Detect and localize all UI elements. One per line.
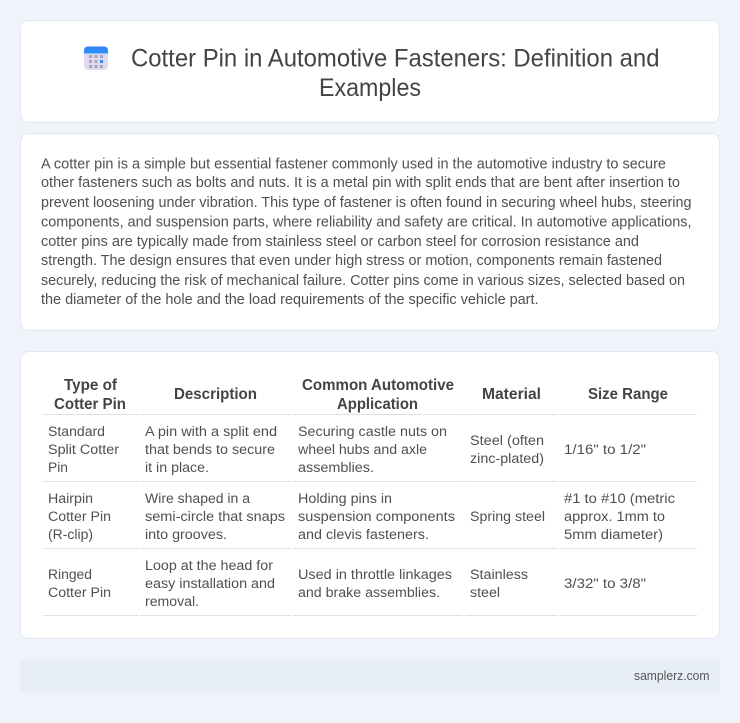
table row: ringed cotter pin: steel bbox=[470, 585, 500, 601]
table row: hairpin cotter pin: Holding pins in bbox=[298, 491, 392, 507]
table row: ringed cotter pin: Stainless bbox=[470, 567, 528, 583]
footer source text: samplerz.com bbox=[634, 669, 710, 683]
paragraph: other fasteners such as bolts and nuts. It is a metal pin with split ends that are bent after insertion to bbox=[41, 175, 680, 191]
paragraph: the diameter of the hole and the load requirements of the specific vehicle part. bbox=[41, 292, 538, 308]
table header row: Application bbox=[337, 396, 418, 413]
table row: ringed cotter pin: Cotter Pin bbox=[48, 585, 111, 601]
table row: hairpin cotter pin: into grooves. bbox=[145, 527, 227, 543]
table header row: Material bbox=[482, 386, 541, 403]
footer bbox=[20, 659, 720, 693]
paragraph: strength. The design ensures that even under high stress or motion, components remain fastened bbox=[41, 253, 662, 269]
table header row: Type of bbox=[64, 377, 118, 394]
panel: definition text bbox=[20, 134, 720, 330]
table row: standard split cotter pin: Pin bbox=[48, 460, 68, 476]
table row: hairpin cotter pin: Cotter Pin bbox=[48, 509, 111, 525]
table row: hairpin cotter pin: Spring steel bbox=[470, 509, 545, 525]
table row: ringed cotter pin: Used in throttle linkages bbox=[298, 567, 452, 583]
table row: hairpin cotter pin bbox=[48, 491, 675, 543]
table row: ringed cotter pin: Loop at the head for bbox=[145, 558, 273, 574]
heading bbox=[131, 46, 660, 102]
paragraph: A cotter pin is a simple but essential fastener commonly used in the automotive industry to secure bbox=[41, 156, 666, 172]
table row: hairpin cotter pin: Hairpin bbox=[48, 491, 93, 507]
table row: ringed cotter pin: removal. bbox=[145, 594, 199, 610]
heading: Cotter Pin in Automotive Fasteners: Definition and bbox=[131, 46, 660, 73]
table row: standard split cotter pin: Standard bbox=[48, 424, 105, 440]
table row: standard split cotter pin: A pin with a split end bbox=[145, 424, 277, 440]
table header row: Cotter Pin bbox=[54, 396, 126, 413]
paragraph bbox=[41, 156, 692, 308]
table row: ringed cotter pin: easy installation and bbox=[145, 576, 275, 592]
table row: standard split cotter pin: that bends to secure bbox=[145, 442, 275, 458]
table row: hairpin cotter pin: approx. 1mm to bbox=[564, 509, 665, 525]
table row: hairpin cotter pin: semi-circle that snaps bbox=[145, 509, 285, 525]
table row: ringed cotter pin: and brake assemblies. bbox=[298, 585, 440, 601]
table row: standard split cotter pin: Steel (often bbox=[470, 433, 544, 449]
paragraph: prevent loosening under vibration. This type of fastener is often found in securing wheel hubs, steering bbox=[41, 195, 692, 211]
table row: standard split cotter pin: 1/16" to 1/2" bbox=[564, 442, 646, 458]
table row: standard split cotter pin: assemblies. bbox=[298, 460, 374, 476]
table row: hairpin cotter pin: suspension components bbox=[298, 509, 455, 525]
table row: standard split cotter pin: Split Cotter bbox=[48, 442, 119, 458]
heading: Examples bbox=[319, 75, 421, 102]
table row: ringed cotter pin bbox=[48, 558, 646, 610]
icon: calendar bbox=[84, 46, 108, 70]
panel: comparison table bbox=[20, 352, 720, 638]
table row: hairpin cotter pin: 5mm diameter) bbox=[564, 527, 663, 543]
table header row bbox=[54, 377, 668, 413]
table row: ringed cotter pin: 3/32" to 3/8" bbox=[564, 576, 646, 592]
table row: hairpin cotter pin: and clevis fasteners. bbox=[298, 527, 429, 543]
table row: hairpin cotter pin: #1 to #10 (metric bbox=[564, 491, 675, 507]
table header row: Size Range bbox=[588, 386, 668, 403]
panel: title bbox=[20, 20, 720, 122]
table row: standard split cotter pin: it in place. bbox=[145, 460, 209, 476]
table row: ringed cotter pin: Ringed bbox=[48, 567, 92, 583]
paragraph: components, and suspension parts, where reliability and safety are critical. In automotive applications, bbox=[41, 214, 692, 230]
table header row: Description bbox=[174, 386, 257, 403]
table row: standard split cotter pin: zinc-plated) bbox=[470, 451, 544, 467]
paragraph: cotter pins are typically made from stainless steel or carbon steel for corrosion resistance and bbox=[41, 234, 639, 250]
table row: standard split cotter pin: Securing castle nuts on bbox=[298, 424, 447, 440]
table header row: Common Automotive bbox=[302, 377, 454, 394]
paragraph: securely, reducing the risk of mechanical failure. Cotter pins come in various sizes, selected based on bbox=[41, 273, 685, 289]
table row: standard split cotter pin: wheel hubs and axle bbox=[297, 442, 427, 458]
table row: hairpin cotter pin: (R-clip) bbox=[48, 527, 93, 543]
table row: hairpin cotter pin: Wire shaped in a bbox=[145, 491, 250, 507]
table row: standard split cotter pin bbox=[48, 424, 646, 476]
